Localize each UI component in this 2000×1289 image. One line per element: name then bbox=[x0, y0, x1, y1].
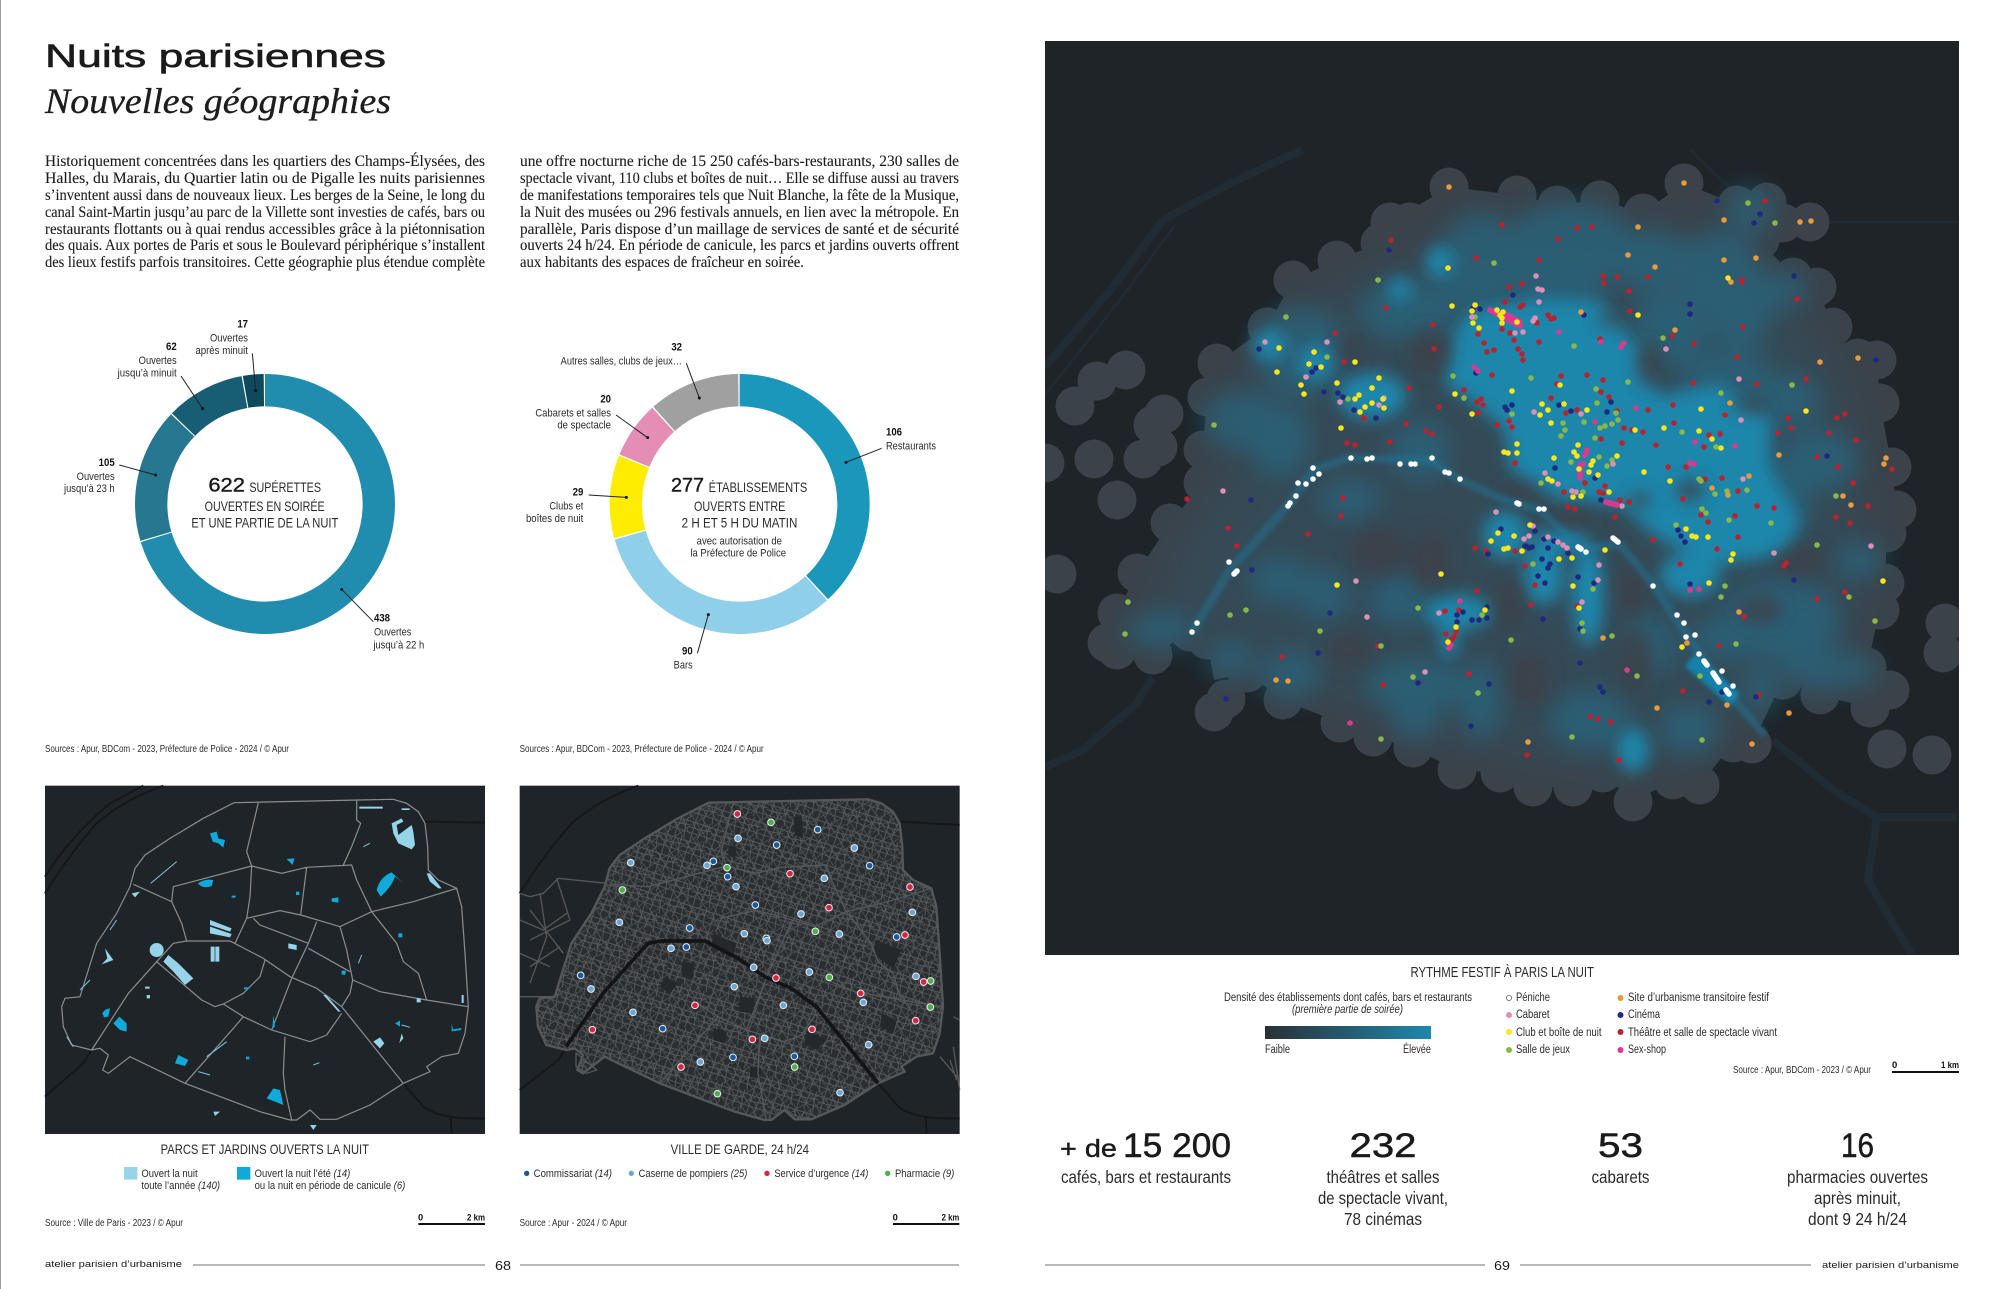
Seine in density bbox=[1192, 458, 1765, 735]
donut chart: établissements: Restaurants bbox=[886, 440, 936, 452]
stat: pharmacies: pharmacies ouvertes bbox=[1787, 1167, 1928, 1187]
donut chart: établissements: Autres salles, clubs de jeux… bbox=[561, 356, 682, 368]
text block: right column: ouverts 24 h/24. En période de canicule, les parcs et jardins ouverts offrent bbox=[520, 237, 960, 254]
stat: cafés bbox=[1060, 1127, 1231, 1187]
text block: left column: des lieux festifs parfois transitoires. Cette géographie plus étendue complète bbox=[45, 254, 485, 271]
text block: left column: Halles, du Marais, du Quartier latin ou de Pigalle les nuits parisiennes bbox=[45, 170, 485, 187]
density medium bbox=[1125, 185, 1885, 755]
map title and legend: Cabaret bbox=[1516, 1009, 1550, 1021]
title: Nouvelles géographies bbox=[44, 81, 391, 121]
dots: yellow clubs bbox=[1277, 268, 1883, 647]
dots: navy cinemas bbox=[1226, 201, 1876, 726]
map title and legend: Club et boîte de nuit bbox=[1516, 1027, 1602, 1039]
footer left: 68 bbox=[495, 1258, 511, 1273]
map title and legend: Faible bbox=[1265, 1044, 1290, 1056]
stat: pharmacies: après minuit, bbox=[1814, 1188, 1901, 1208]
donut chart: établissements: 277 bbox=[671, 476, 704, 497]
parks: open in summer bbox=[102, 832, 462, 1105]
donut chart: établissements: ÉTABLISSEMENTS bbox=[709, 480, 807, 495]
donut chart: établissements: Sources : Apur, BDCom - 2023, Préfecture de Police - 2024 / © Apur bbox=[520, 744, 764, 755]
donut chart: établissements: 32 bbox=[671, 342, 682, 354]
donut chart: établissements: Cabarets et salles bbox=[535, 408, 611, 420]
map title and legend: (première partie de soirée) bbox=[1292, 1004, 1403, 1016]
donut chart: supérettes: ET UNE PARTIE DE LA NUIT bbox=[191, 516, 339, 531]
panel: ville de garde map: VILLE DE GARDE, 24 h/24 bbox=[671, 1141, 809, 1157]
donut chart: établissements: avec autorisation de bbox=[697, 535, 782, 547]
donut chart: établissements: 20 bbox=[600, 394, 611, 406]
panel: parcs et jardins map: 2 km bbox=[467, 1212, 485, 1222]
footer right bbox=[1045, 1258, 1959, 1273]
donut chart: établissements: 2 H ET 5 H DU MATIN bbox=[682, 516, 797, 531]
text block: left column: s’inventent aussi dans de nouveaux lieux. Les berges de la Seine, le long du bbox=[45, 187, 485, 204]
stat: pharmacies: 16 bbox=[1841, 1127, 1874, 1165]
page edge bbox=[0, 0, 1, 1289]
donut chart: établissements: 90 bbox=[682, 646, 693, 658]
pharmacies bbox=[619, 819, 934, 1097]
footer left bbox=[45, 1258, 959, 1273]
dark patches bbox=[1326, 314, 1826, 710]
services d'urgence bbox=[589, 811, 927, 1070]
map title and legend: 1 km bbox=[1941, 1060, 1959, 1071]
rivers bbox=[1045, 150, 1957, 955]
footer right: atelier parisien d’urbanisme bbox=[1822, 1260, 1959, 1271]
panel: ville de garde map: Caserne de pompiers (25) bbox=[639, 1168, 747, 1180]
stat: théâtres: de spectacle vivant, bbox=[1318, 1188, 1448, 1208]
donut chart: établissements: Bars bbox=[674, 660, 693, 672]
density high bbox=[1253, 246, 1800, 772]
map title and legend: Péniche bbox=[1516, 992, 1550, 1004]
gradient bar bbox=[1265, 1026, 1431, 1039]
panel: ville de garde map: 0 bbox=[893, 1212, 898, 1222]
panel: parcs et jardins map: toute l’année (140) bbox=[141, 1180, 220, 1192]
donut chart: supérettes: Ouvertes bbox=[77, 471, 115, 483]
donut chart: supérettes: jusqu’à 22 h bbox=[372, 639, 424, 651]
panel: density map bbox=[1045, 41, 1959, 955]
density broad bbox=[1173, 266, 1850, 757]
map title and legend: RYTHME FESTIF À PARIS LA NUIT bbox=[1410, 964, 1594, 981]
donut chart: supérettes: Ouvertes bbox=[139, 355, 177, 367]
map title and legend bbox=[1224, 964, 1959, 1076]
title bbox=[44, 38, 391, 121]
donut chart: supérettes: jusqu’à minuit bbox=[117, 368, 177, 380]
dots: pink cabarets bbox=[1223, 276, 1871, 672]
stat: théâtres: 232 bbox=[1350, 1127, 1416, 1165]
panel: parcs et jardins map: 0 bbox=[418, 1212, 423, 1222]
dots: magenta sex-shops bbox=[1350, 310, 1735, 723]
panel: parcs et jardins map: Ouvert la nuit bbox=[141, 1168, 198, 1180]
donut chart: supérettes: SUPÉRETTES bbox=[249, 480, 321, 495]
panel: parcs et jardins map bbox=[45, 786, 485, 1229]
footer right: 69 bbox=[1494, 1258, 1510, 1273]
donut chart: supérettes bbox=[45, 318, 424, 755]
stat: pharmacies bbox=[1787, 1127, 1928, 1229]
map title and legend: Source : Apur, BDCom - 2023 / © Apur bbox=[1733, 1065, 1872, 1076]
map title and legend: Élevée bbox=[1403, 1043, 1431, 1056]
Seine bbox=[566, 941, 878, 1083]
panel: parcs et jardins map: Source : Ville de Paris - 2023 / © Apur bbox=[45, 1218, 184, 1229]
donut chart: établissements: 29 bbox=[573, 486, 583, 498]
text block: left column: canal Saint-Martin jusqu’au parc de la Villette sont investies de cafés, bars ou bbox=[45, 204, 485, 221]
text block: right column: de manifestations temporaires tels que Nuit Blanche, la fête de la Musique, bbox=[520, 187, 959, 204]
arrondissement boundaries bbox=[62, 799, 468, 1120]
text block: right column: parallèle, Paris dispose d’un maillage de services de santé et de sécurité bbox=[520, 221, 959, 238]
stat: théâtres bbox=[1318, 1127, 1448, 1229]
donut chart: supérettes: après minuit bbox=[195, 345, 248, 357]
stat: cafés: + de bbox=[1060, 1135, 1117, 1163]
donut chart: supérettes: 105 bbox=[99, 457, 115, 469]
donut chart: supérettes: Sources : Apur, BDCom - 2023, Préfecture de Police - 2024 / © Apur bbox=[45, 744, 290, 755]
dots: orange transitional sites bbox=[1276, 183, 1886, 744]
dots: white barges bbox=[1192, 458, 1733, 694]
text block: right column: une offre nocturne riche de 15 250 cafés-bars-restaurants, 230 salles de bbox=[520, 153, 959, 170]
stat: cabarets: cabarets bbox=[1592, 1167, 1650, 1187]
casernes de pompiers bbox=[588, 835, 919, 1096]
donut chart: établissements: 106 bbox=[886, 426, 902, 438]
text block: left column: restaurants flottants ou à quai rendus accessibles grâce à la piétonnisation bbox=[45, 221, 485, 238]
text block: right column: spectacle vivant, 110 clubs et boîtes de nuit… Elle se diffuse aussi au travers bbox=[520, 170, 959, 187]
donut chart: supérettes: 17 bbox=[237, 318, 248, 330]
text block: left column bbox=[45, 153, 486, 271]
density base bbox=[1045, 183, 1945, 802]
donut chart: supérettes: 622 bbox=[208, 476, 245, 497]
donut chart: établissements: boîtes de nuit bbox=[526, 513, 583, 525]
main roads bbox=[536, 799, 943, 1120]
donut chart: supérettes: jusqu’à 23 h bbox=[63, 483, 115, 495]
parks: open all year bbox=[102, 807, 464, 1130]
text block: left column: Historiquement concentrées dans les quartiers des Champs-Élysées, des bbox=[45, 153, 485, 170]
map title and legend: 0 bbox=[1892, 1060, 1897, 1071]
panel: ville de garde map: Pharmacie (9) bbox=[895, 1168, 954, 1180]
donut chart: supérettes: 62 bbox=[166, 341, 177, 353]
dots: green game halls bbox=[1125, 203, 1875, 740]
dots: red theatres bbox=[1187, 201, 1892, 760]
donut chart: supérettes: OUVERTES EN SOIRÉE bbox=[205, 499, 325, 514]
donut chart: établissements: Clubs et bbox=[549, 500, 583, 512]
donut chart: établissements: OUVERTS ENTRE bbox=[694, 499, 785, 514]
stat: cabarets: 53 bbox=[1598, 1127, 1643, 1165]
donut chart: supérettes: 438 bbox=[374, 613, 390, 625]
title: Nuits parisiennes bbox=[45, 38, 386, 74]
map title and legend: Cinéma bbox=[1628, 1009, 1660, 1021]
panel: ville de garde map bbox=[520, 786, 960, 1229]
map title and legend: Sex-shop bbox=[1628, 1044, 1666, 1056]
panel: parcs et jardins map: ou la nuit en période de canicule (6) bbox=[255, 1180, 405, 1192]
donut chart: supérettes: Ouvertes bbox=[374, 627, 412, 639]
panel: ville de garde map: Commissariat (14) bbox=[534, 1168, 612, 1180]
panel: parcs et jardins map: PARCS ET JARDINS OUVERTS LA NUIT bbox=[161, 1141, 369, 1157]
stat: cabarets bbox=[1592, 1127, 1650, 1187]
text block: right column bbox=[520, 153, 960, 271]
panel: ville de garde map: Service d’urgence (14) bbox=[774, 1168, 868, 1180]
donut chart: établissements: la Préfecture de Police bbox=[690, 548, 786, 560]
donut chart: établissements: de spectacle bbox=[557, 420, 611, 432]
panel: ville de garde map: 2 km bbox=[942, 1212, 959, 1222]
donut chart: supérettes: Ouvertes bbox=[210, 332, 248, 344]
donut chart: établissements bbox=[520, 342, 936, 755]
text block: left column: des quais. Aux portes de Paris et sous le Boulevard périphérique s’installent bbox=[45, 237, 486, 254]
street network bbox=[538, 800, 942, 1119]
stat: cafés: cafés, bars et restaurants bbox=[1061, 1167, 1231, 1187]
stat: pharmacies: dont 9 24 h/24 bbox=[1808, 1209, 1907, 1229]
map title and legend: Salle de jeux bbox=[1516, 1044, 1570, 1056]
stat: théâtres: 78 cinémas bbox=[1344, 1209, 1422, 1229]
panel: ville de garde map: Source : Apur - 2024 / © Apur bbox=[520, 1218, 628, 1229]
map title and legend: Densité des établissements dont cafés, bars et restaurants bbox=[1224, 992, 1472, 1004]
map title and legend: Théâtre et salle de spectacle vivant bbox=[1628, 1027, 1778, 1039]
panel: parcs et jardins map: Ouvert la nuit l’été (14) bbox=[255, 1168, 350, 1180]
footer left: atelier parisien d’urbanisme bbox=[45, 1259, 182, 1270]
stat: cafés: 15 200 bbox=[1123, 1127, 1231, 1165]
map title and legend: Site d’urbanisme transitoire festif bbox=[1628, 992, 1770, 1004]
stat: théâtres: théâtres et salles bbox=[1326, 1167, 1440, 1187]
commissariats bbox=[577, 826, 900, 1061]
text block: right column: aux habitants des espaces de fraîcheur en soirée. bbox=[520, 254, 804, 271]
text block: right column: la Nuit des musées ou 296 festivals annuels, en lien avec la métropole. En bbox=[520, 204, 959, 221]
